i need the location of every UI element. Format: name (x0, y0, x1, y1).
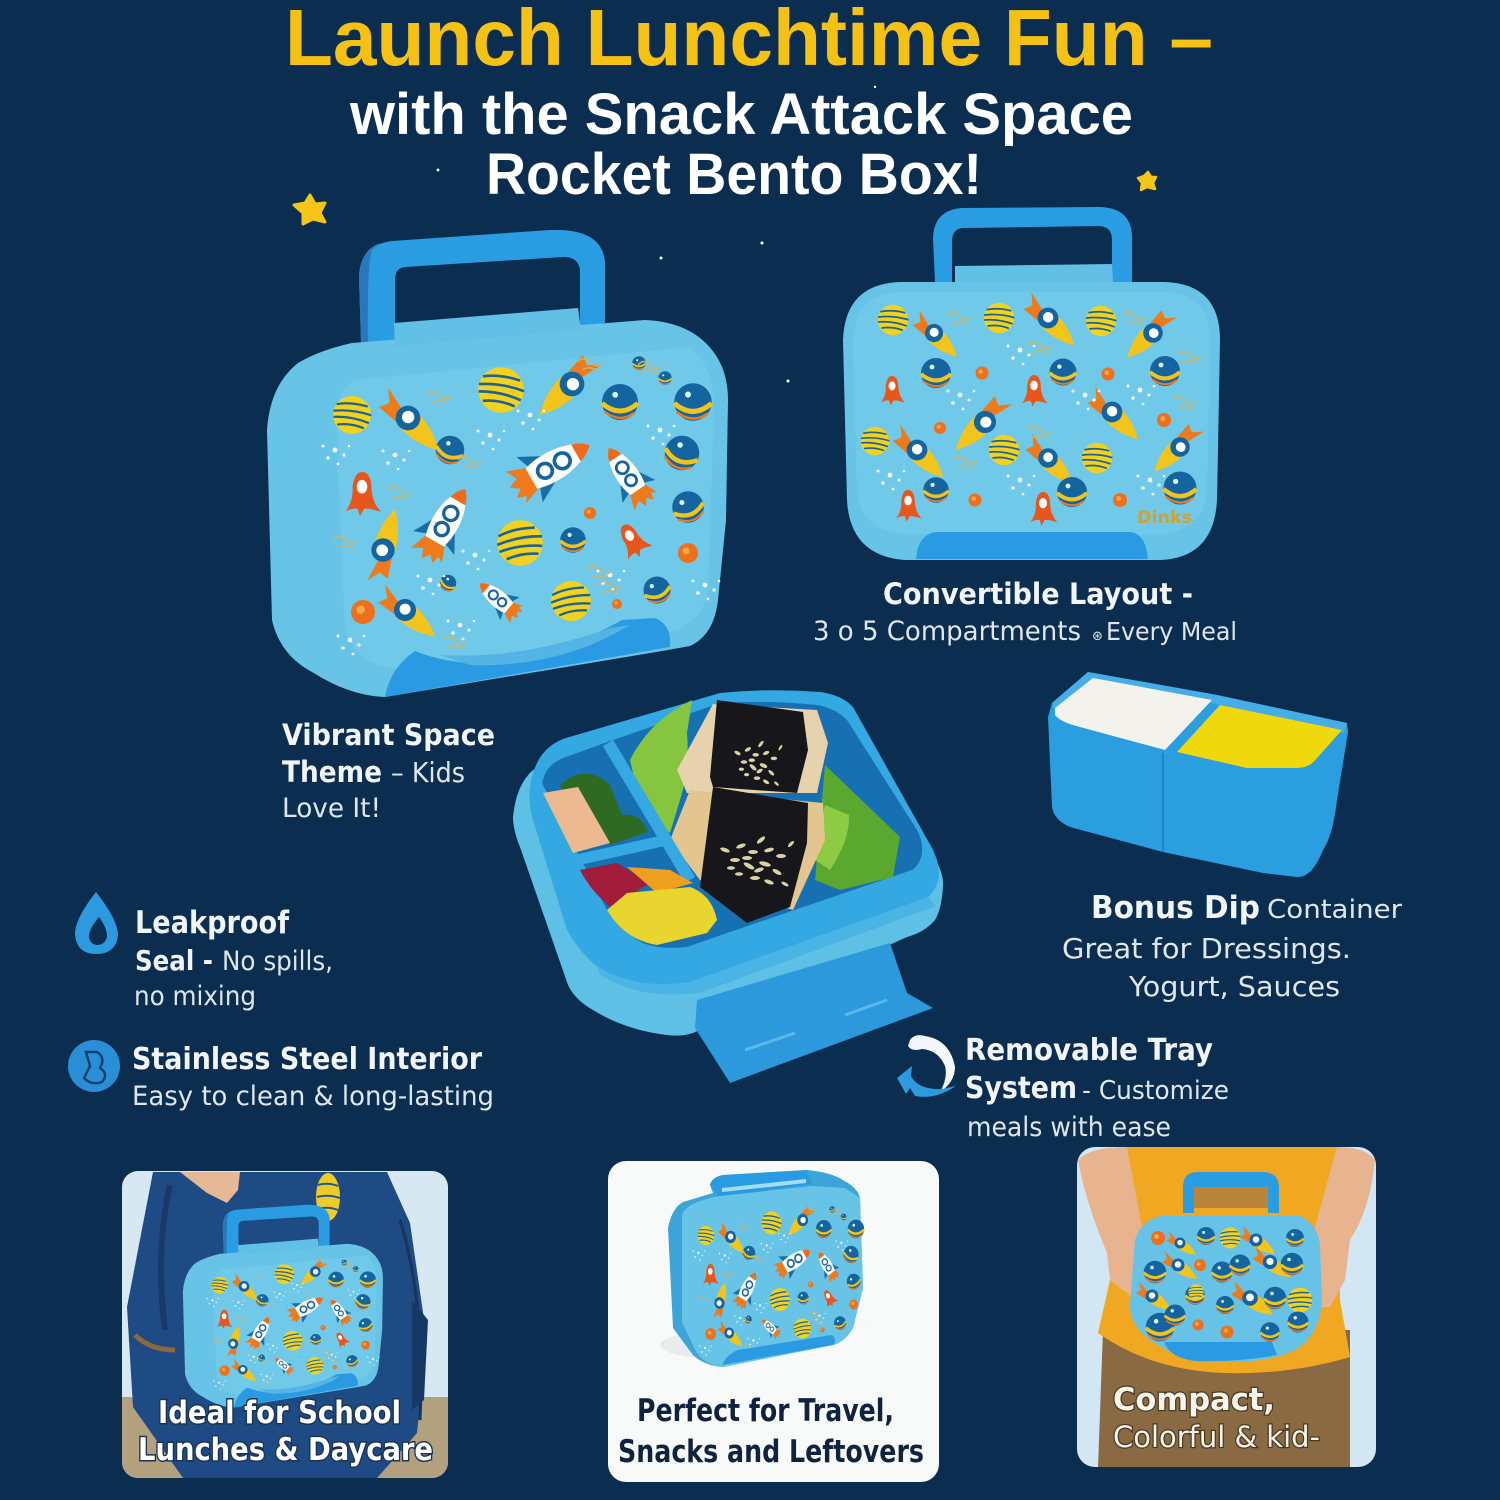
lunchbox (1130, 1172, 1322, 1362)
caption: convertible layout: Every Meal (1106, 617, 1237, 646)
photo panel: travel and snacks (608, 1161, 939, 1482)
upper tray rim (529, 690, 939, 985)
title (285, 0, 1213, 207)
icon: circular arrows (897, 1035, 956, 1097)
caption: bonus dip container (1062, 890, 1402, 1003)
text: removable tray system (965, 1033, 1229, 1143)
tray dividers (608, 743, 690, 880)
ground (122, 1397, 448, 1478)
handle (933, 207, 1132, 282)
lunchbox (183, 1205, 383, 1407)
brand mark: Dinks (1137, 508, 1192, 528)
bonus dip container (1048, 672, 1348, 877)
grain snack (543, 787, 610, 853)
text: leakproof seal: No spills, (222, 946, 333, 977)
interior (542, 702, 922, 948)
photo panel: compact and colorful: Colorful & kid- (1113, 1420, 1320, 1454)
backpack (127, 1172, 427, 1478)
red fruit (580, 863, 650, 907)
photo panel: school backpack (122, 1171, 448, 1478)
broccoli (560, 774, 648, 845)
caption: bonus dip container: Great for Dressings. (1062, 932, 1351, 965)
text: leakproof seal: no mixing (134, 981, 256, 1012)
text: stainless steel interior (132, 1042, 494, 1112)
text: removable tray system: meals with ease (967, 1112, 1171, 1143)
hand and tag (180, 1172, 240, 1203)
caption: Ideal for School (158, 1395, 401, 1431)
text: stainless steel interior: Stainless Steel Interior (132, 1042, 482, 1077)
caption: vibrant space theme: Love It! (282, 793, 381, 824)
text: leakproof seal: Seal - (135, 944, 213, 977)
decorative stars (294, 86, 1156, 383)
photo panel: travel and snacks: Snacks and Leftovers (618, 1434, 924, 1470)
caption: convertible layout: ⊛ (1092, 629, 1103, 644)
trousers (1098, 1330, 1350, 1468)
caption: convertible layout: Convertible Layout - (883, 577, 1193, 611)
caption: vibrant space theme: Theme (282, 755, 382, 789)
shirt (1098, 1147, 1350, 1373)
arms and hands (1078, 1147, 1145, 1300)
caption: vibrant space theme: – Kids (391, 756, 465, 789)
caption: vibrant space theme: Vibrant Space (282, 718, 495, 752)
flap (695, 943, 933, 1083)
printed space pattern (859, 291, 1205, 526)
sandwich lower (670, 790, 825, 910)
caption: bonus dip container: Yogurt, Sauces (1128, 970, 1340, 1003)
text: stainless steel interior: Easy to clean & long-lasting (132, 1081, 494, 1112)
large lunchbox: vibrant space theme (267, 230, 728, 697)
lower box (513, 720, 943, 1036)
orange fruit (627, 867, 693, 893)
sandwich upper (677, 704, 828, 793)
box body (843, 282, 1220, 560)
icon: water drop (75, 892, 118, 954)
text: removable tray system: System (965, 1071, 1077, 1106)
text: leakproof seal: Leakproof (135, 905, 289, 941)
text: leakproof seal (134, 905, 333, 1012)
text: removable tray system: Removable Tray (965, 1033, 1213, 1068)
photo panel: school backpack: Lunches & Daycare (138, 1432, 433, 1468)
front clasp (916, 532, 1148, 559)
caption: convertible layout: 3 o 5 Compartments (813, 616, 1081, 647)
icon: stainless steel badge (68, 1040, 120, 1092)
yellow fruit (607, 887, 717, 945)
caption: Perfect for Travel, (637, 1393, 894, 1429)
caption: bonus dip container: Bonus Dip (1091, 890, 1260, 926)
open bento tray with food (513, 690, 943, 1083)
caption: vibrant space theme (282, 718, 495, 824)
photo panel: compact and colorful (1077, 1147, 1376, 1468)
text: removable tray system: - Customize (1082, 1076, 1229, 1106)
title: with the Snack Attack Space (349, 82, 1133, 147)
lettuce right (815, 765, 900, 890)
caption: bonus dip container: Container (1267, 895, 1402, 925)
lunchbox (660, 1170, 868, 1367)
small lunchbox: convertible layout (843, 207, 1220, 560)
title: Rocket Bento Box! (486, 142, 982, 207)
caption: Compact, (1113, 1382, 1275, 1418)
caption: convertible layout (813, 577, 1237, 647)
lettuce left (630, 700, 692, 833)
